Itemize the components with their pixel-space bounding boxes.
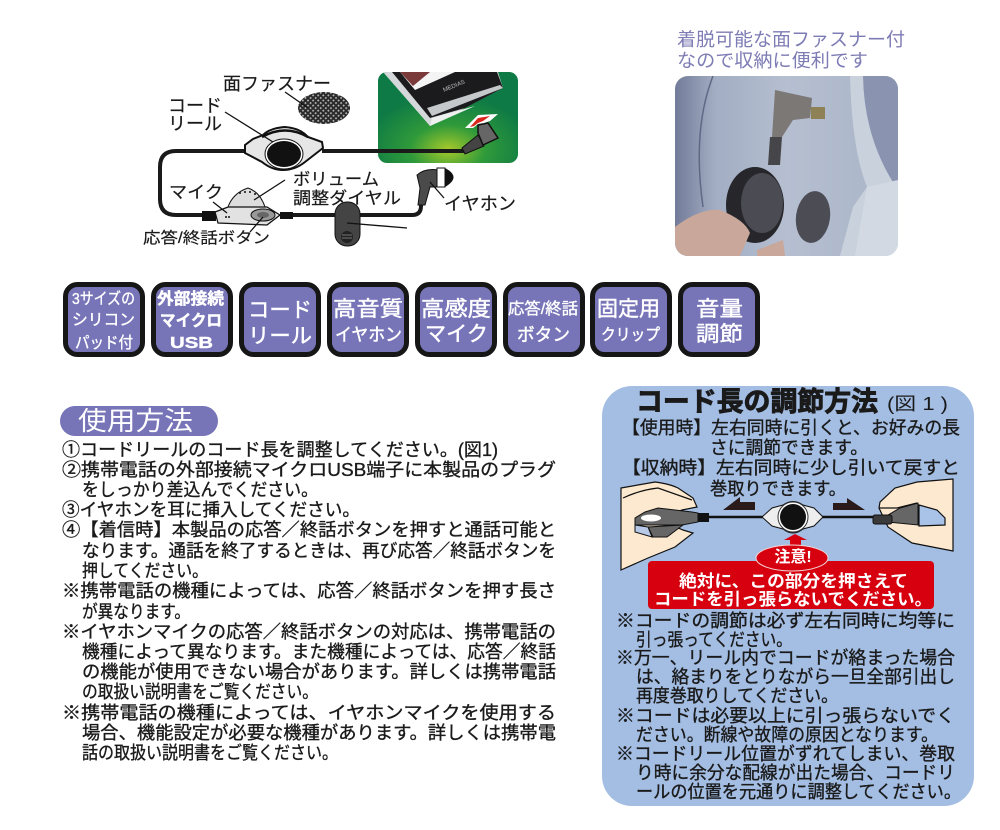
leader lines (213, 92, 444, 232)
usage text: 場合、機能設定が必要な機種があります。詳しくは携帯電 (82, 723, 556, 743)
panel notes: ※コードの調節は必ず左右同時に均等に (616, 611, 955, 631)
hook and loop pad (298, 92, 350, 124)
badge: 3 size pads: パッド付 (75, 334, 133, 352)
diagram labels (143, 74, 516, 247)
badge: high quality earphone (330, 284, 406, 354)
product diagram (143, 72, 518, 247)
diagram labels: リール (168, 114, 222, 134)
panel heading: コード長の調節方法 (636, 387, 878, 417)
phone photo inset (378, 72, 518, 163)
badge: high quality earphone: イヤホン (335, 325, 402, 345)
badge: 3 size pads (66, 284, 142, 354)
usage text (62, 440, 556, 763)
badge: 3 size pads: 3サイズの (72, 290, 135, 308)
USB plug and red arrow (462, 114, 498, 154)
clip (335, 202, 360, 246)
panel notes: ※コードは必要以上に引っ張らないでく (616, 706, 955, 726)
red warning callout: コードを引っ張らないでください。 (654, 590, 932, 609)
usage text: ④【着信時】本製品の応答／終話ボタンを押すと通話可能と (62, 520, 556, 540)
usage text: なります。通話を終了するときは、再び応答／終話ボタンを (82, 541, 556, 561)
panel notes: ※万一、リール内でコードが絡まった場合 (616, 648, 955, 668)
usage text: の機能が使用できない場合があります。詳しくは携帯電話 (82, 662, 556, 682)
panel notes: ださい。断線や故障の原因となります。 (636, 725, 938, 745)
panel instructions (622, 418, 960, 499)
badge: sensitive mic (418, 284, 494, 354)
badge: volume: 音量 (696, 298, 743, 321)
panel instructions: さに調節できます。 (710, 438, 868, 458)
badge: cord reel: コード (248, 299, 312, 322)
badge: volume: 調節 (696, 323, 743, 346)
red warning callout (648, 534, 934, 609)
usage text: ※イヤホンマイクの応答／終話ボタンの対応は、携帯電話の (62, 622, 556, 642)
badge: micro USB (154, 284, 230, 354)
feature badges (66, 284, 758, 354)
badge: clip: クリップ (601, 326, 660, 344)
phone photo inset: MEDIAS (442, 80, 466, 94)
badge: 3 size pads: シリコン (72, 312, 135, 329)
badge: micro USB: 外部接続 (157, 289, 224, 308)
panel notes: ールの位置を元通りに調整してください。 (636, 782, 961, 802)
usage heading (60, 406, 218, 436)
diagram labels: マイク (169, 183, 223, 202)
badge: sensitive mic: マイク (425, 323, 488, 346)
usage text: が異なります。 (82, 602, 190, 622)
photo: pad attached to car interior (675, 76, 898, 256)
usage heading: 使用方法 (78, 406, 193, 436)
usage text: ①コードリールのコード長を調整してください。(図1) (62, 440, 498, 460)
diagram labels: イヤホン (444, 194, 516, 214)
badge: sensitive mic: 高感度 (421, 298, 491, 321)
usage text: 話の取扱い説明書をご覧ください。 (82, 743, 338, 763)
badge: answer button: ボタン (517, 325, 570, 345)
diagram labels: ボリューム (293, 170, 379, 189)
panel instructions: 巻取りできます。 (710, 479, 846, 499)
badge: volume (680, 284, 758, 354)
panel notes: 再度巻取りしてください。 (636, 686, 838, 706)
usage text: の取扱い説明書をご覧ください。 (82, 682, 318, 702)
panel notes: ※コードリール位置がずれてしまい、巻取 (616, 744, 955, 764)
badge: micro USB: USB (170, 335, 213, 352)
diagram labels: 応答/終話ボタン (143, 229, 270, 247)
usage text: ※携帯電話の機種によっては、イヤホンマイクを使用する (62, 703, 556, 723)
red warning callout: 絶対に、この部分を押さえて (679, 572, 908, 591)
microphone control unit (202, 188, 293, 225)
photo caption: なので収納に便利です (677, 50, 868, 71)
usage text: ※携帯電話の機種によっては、応答／終話ボタンを押す長さ (62, 581, 556, 601)
illustration: hands pulling cord (621, 479, 953, 570)
red warning callout: 注意! (774, 548, 812, 566)
badge: cord reel (242, 284, 318, 354)
earphone (417, 168, 454, 205)
badge: clip (592, 284, 670, 354)
panel notes: 引っ張ってください。 (636, 630, 792, 650)
panel instructions: 【使用時】左右同時に引くと、お好みの長 (622, 418, 960, 438)
diagram labels: 面ファスナー (223, 74, 331, 94)
photo caption: 着脱可能な面ファスナー付 (677, 29, 905, 50)
cord reel (245, 127, 323, 170)
panel instructions: 【収納時】左右同時に少し引いて戻すと (622, 458, 960, 478)
panel heading: (図 1 ) (887, 394, 948, 414)
badge: high quality earphone: 高音質 (333, 298, 403, 321)
panel notes (616, 611, 961, 802)
usage text: をしっかり差込んでください。 (82, 480, 318, 500)
badge: answer button: 応答/終話 (508, 300, 578, 318)
badge: cord reel: リール (248, 325, 312, 348)
panel notes: り時に余分な配線が出た場合、コードリ (636, 763, 955, 783)
diagram labels: 調整ダイヤル (293, 189, 401, 208)
badge: answer button (506, 284, 582, 354)
photo caption (677, 29, 905, 71)
usage text: ②携帯電話の外部接続マイクロUSB端子に本製品のプラグ (62, 460, 556, 480)
usage text: 押してください。 (82, 561, 208, 581)
panel: cord length adjustment (602, 386, 974, 806)
cord (160, 151, 247, 215)
diagram labels: コード (168, 96, 222, 116)
badge: clip: 固定用 (597, 298, 660, 321)
usage text: ③イヤホンを耳に挿入してください。 (62, 500, 360, 520)
panel notes: は、絡まりをとりながら一旦全部引出し (636, 667, 955, 687)
usage text: 機種によって異なります。また機種によっては、応答／終話 (82, 642, 556, 662)
badge: micro USB: マイクロ (160, 312, 222, 330)
